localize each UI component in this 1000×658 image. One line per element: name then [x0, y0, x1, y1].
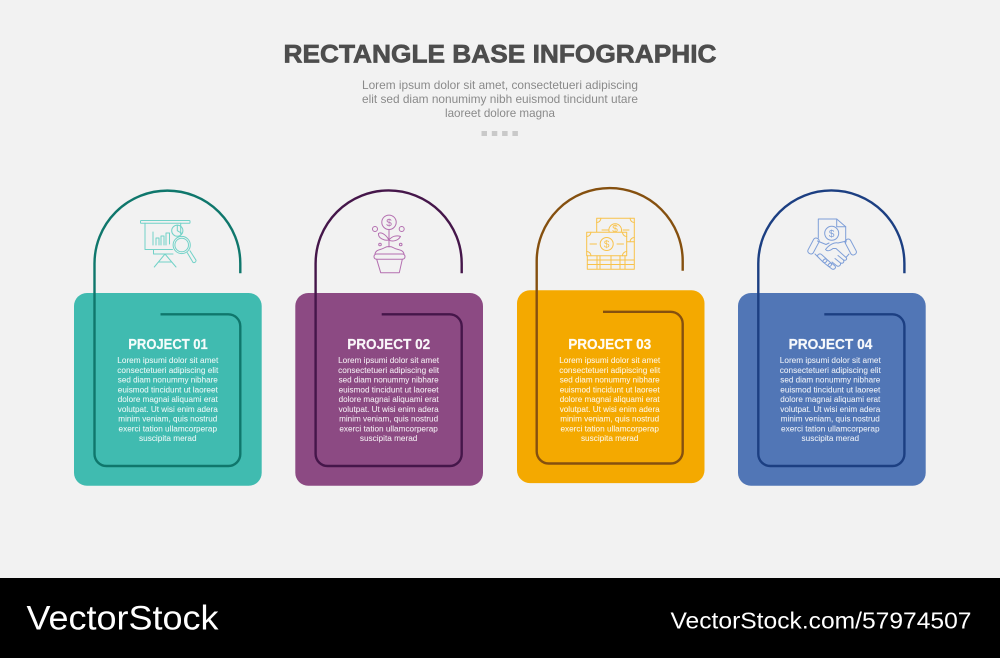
panel: project 04 [738, 190, 926, 486]
body text [338, 355, 440, 443]
project heading: PROJECT 01 [128, 337, 208, 353]
body text: suscipita merad [139, 433, 197, 443]
body text: Lorem ipsumi dolor sit amet [780, 355, 881, 365]
icon: handshake with document [807, 219, 857, 269]
icon: banknotes and coin stack: $ [604, 240, 610, 251]
panel: project 03 [517, 188, 704, 483]
title: RECTANGLE BASE INFOGRAPHIC [284, 40, 716, 68]
body text: Lorem ipsumi dolor sit amet [338, 355, 440, 365]
body text: volutpat. Ut wisi enim adera [780, 404, 881, 414]
body text: exerci tation ullamcorperap [339, 423, 438, 433]
body text: dolore magnai aliquami erat [560, 394, 660, 404]
subtitle text block [362, 78, 638, 120]
subtitle text block: laoreet dolore magna [445, 106, 555, 120]
body text: Lorem ipsumi dolor sit amet [117, 355, 219, 365]
body text: exerci tation ullamcorperap [781, 423, 880, 433]
body text: volutpat. Ut wisi enim adera [560, 404, 660, 414]
body text: consectetueri adipiscing elit [338, 365, 440, 375]
body text: suscipita merad [802, 433, 859, 443]
project heading: PROJECT 03 [568, 337, 651, 353]
body text: suscipita merad [581, 433, 639, 443]
footer bar [0, 578, 1000, 658]
icon: banknotes and coin stack [587, 218, 634, 269]
project heading: PROJECT 02 [347, 337, 430, 353]
body text [117, 355, 219, 443]
card background [738, 293, 926, 486]
body text: euismod tincidunt ut laoreet [560, 384, 660, 394]
body text: sed diam nonummy nibhare [339, 374, 439, 384]
body text: euismod tincidunt ut laoreet [339, 384, 439, 394]
body text: minim veniam, quis nostrud [339, 414, 438, 424]
icon: presentation board with magnifier [140, 220, 196, 267]
footer logo: VectorStock [26, 599, 219, 637]
subtitle text block: Lorem ipsum dolor sit amet, consectetueri adipiscing [362, 78, 638, 92]
body text [780, 355, 881, 443]
panel: project 01 [74, 191, 262, 486]
body text: exerci tation ullamcorperap [560, 423, 659, 433]
body text: volutpat. Ut wisi enim adera [339, 404, 439, 414]
card background [517, 290, 704, 483]
panel: project 02 [295, 190, 483, 486]
body text: volutpat. Ut wisi enim adera [118, 404, 218, 414]
body text: sed diam nonummy nibhare [780, 374, 881, 384]
outline arch [537, 188, 683, 463]
body text: consectetueri adipiscing elit [117, 365, 219, 375]
body text: minim veniam, quis nostrud [118, 414, 218, 424]
body text: minim veniam, quis nostrud [781, 414, 880, 424]
card background [295, 293, 483, 486]
icon: banknotes and coin stack: $ [612, 224, 618, 235]
subtitle text block: elit sed diam nonumimy nibh euismod tincidunt utare [362, 92, 638, 106]
icon: handshake with document: $ [829, 229, 835, 240]
icon: money plant in pot [372, 215, 405, 273]
body text: suscipita merad [360, 433, 418, 443]
body text: consectetueri adipiscing elit [559, 365, 661, 375]
title dots [482, 131, 518, 136]
project heading: PROJECT 04 [789, 337, 872, 353]
body text: dolore magnai aliquami erat [118, 394, 218, 404]
body text: dolore magnai aliquami erat [780, 394, 881, 404]
body text: euismod tincidunt ut laoreet [780, 384, 881, 394]
body text: euismod tincidunt ut laoreet [118, 384, 218, 394]
body text: Lorem ipsumi dolor sit amet [559, 355, 661, 365]
body text: sed diam nonummy nibhare [118, 374, 218, 384]
outline arch [316, 190, 462, 466]
body text: dolore magnai aliquami erat [339, 394, 439, 404]
body text: exerci tation ullamcorperap [119, 423, 217, 433]
outline arch [94, 191, 240, 466]
footer image id: VectorStock.com/57974507 [670, 607, 972, 633]
card background [74, 293, 262, 486]
body text: minim veniam, quis nostrud [560, 414, 660, 424]
body text: consectetueri adipiscing elit [780, 365, 881, 375]
icon: money plant in pot: $ [386, 218, 392, 229]
body text: sed diam nonummy nibhare [560, 374, 660, 384]
outline arch [758, 190, 904, 466]
body text [559, 355, 661, 443]
